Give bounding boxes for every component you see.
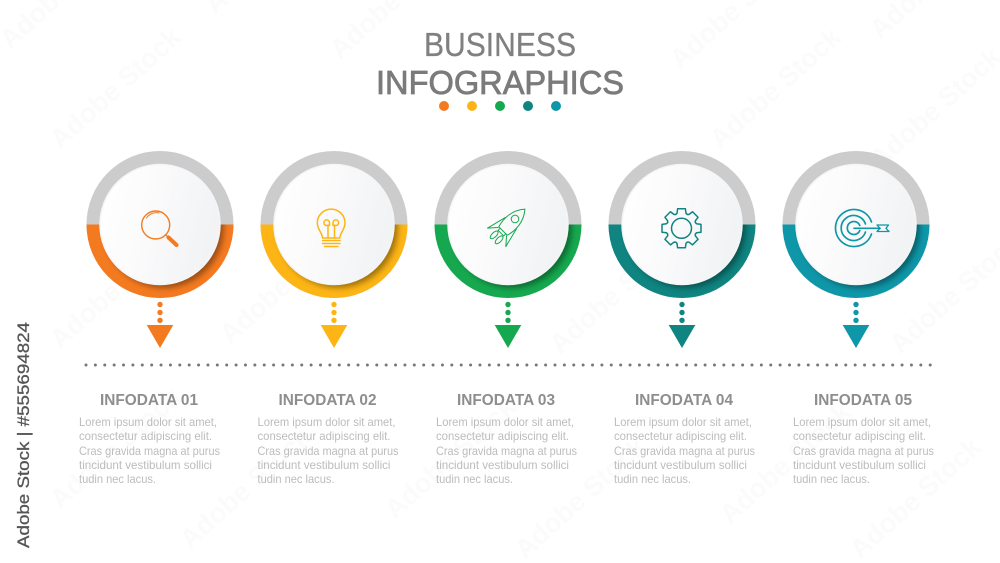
- column 5 text: consectetur adipiscing elit.: [793, 429, 926, 443]
- title: INFOGRAPHICS: [376, 64, 624, 101]
- column 2 text: tincidunt vestibulum sollici: [258, 458, 390, 472]
- step 4 badge: [608, 151, 756, 298]
- icon: target with arrow: [836, 210, 889, 247]
- column 5 text: Cras gravida magna at purus: [793, 444, 934, 458]
- step 3 arrow: [495, 302, 521, 348]
- watermark pattern: Adobe Stock: [44, 221, 187, 354]
- column 3 text: consectetur adipiscing elit.: [436, 429, 569, 443]
- column 1 text: Cras gravida magna at purus: [79, 444, 220, 458]
- watermark pattern: Adobe Stock: [214, 216, 357, 349]
- column 3 text: Lorem ipsum dolor sit amet,: [436, 415, 574, 429]
- column 2 text: [258, 392, 398, 486]
- icon: light bulb: [317, 209, 345, 246]
- step 1 arrow: [147, 302, 173, 348]
- watermark pattern: Adobe Stock: [174, 421, 317, 554]
- step 2 badge: [260, 151, 408, 298]
- column 1 text: tudin nec lacus.: [79, 472, 156, 486]
- column 2 text: consectetur adipiscing elit.: [258, 429, 390, 443]
- step 4 arrow: [669, 302, 695, 348]
- column 5 text: INFODATA 05: [814, 392, 912, 409]
- stock id side label: Adobe Stock | #555694824: [14, 322, 33, 548]
- column 4 text: tincidunt vestibulum sollici: [614, 458, 747, 472]
- column 1 text: Lorem ipsum dolor sit amet,: [79, 415, 217, 429]
- step 3 badge: [434, 151, 582, 298]
- column 4 text: [614, 392, 755, 486]
- watermark pattern: Adobe Stock: [44, 21, 187, 154]
- column 3 text: tudin nec lacus.: [436, 472, 513, 486]
- step 5 arrow: [843, 302, 869, 348]
- watermark pattern: Adobe Stock: [714, 396, 857, 529]
- column 3 text: INFODATA 03: [457, 392, 555, 409]
- column 2 text: INFODATA 02: [278, 392, 377, 409]
- title colour dots: [439, 101, 561, 111]
- column 4 text: Cras gravida magna at purus: [614, 444, 755, 458]
- column 4 text: consectetur adipiscing elit.: [614, 429, 747, 443]
- column 4 text: Lorem ipsum dolor sit amet,: [614, 415, 752, 429]
- step 2 arrow: [321, 302, 347, 348]
- icon: rocket: [484, 200, 534, 250]
- column 2 text: Cras gravida magna at purus: [258, 444, 398, 458]
- column 5 text: Lorem ipsum dolor sit amet,: [793, 415, 931, 429]
- column 3 text: tincidunt vestibulum sollici: [436, 458, 569, 472]
- watermark pattern: Adobe Stock: [509, 431, 652, 563]
- column 5 text: [793, 392, 934, 486]
- step 5 badge: [782, 151, 930, 298]
- watermark pattern: Adobe Stock: [544, 226, 687, 359]
- icon: gear: [662, 209, 701, 248]
- column 1 text: [79, 392, 220, 486]
- icon: magnifier: [142, 211, 176, 245]
- column 1 text: tincidunt vestibulum sollici: [79, 458, 212, 472]
- column 1 text: consectetur adipiscing elit.: [79, 429, 212, 443]
- column 3 text: [436, 392, 577, 486]
- column 2 text: tudin nec lacus.: [258, 472, 334, 486]
- watermark pattern: Adobe Stock: [704, 21, 847, 154]
- column 5 text: tudin nec lacus.: [793, 472, 870, 486]
- watermark pattern: Adobe Stock: [379, 391, 522, 524]
- column 4 text: tudin nec lacus.: [614, 472, 691, 486]
- title: BUSINESS: [424, 26, 576, 63]
- watermark pattern: Adobe Stock: [44, 381, 187, 514]
- column 5 text: tincidunt vestibulum sollici: [793, 458, 926, 472]
- column 3 text: Cras gravida magna at purus: [436, 444, 577, 458]
- title: [376, 26, 624, 101]
- column 2 text: Lorem ipsum dolor sit amet,: [258, 415, 396, 429]
- watermark pattern: Adobe Stock: [844, 431, 987, 563]
- step 1 badge: [86, 151, 234, 298]
- column 4 text: INFODATA 04: [635, 392, 733, 409]
- column 1 text: INFODATA 01: [100, 392, 198, 409]
